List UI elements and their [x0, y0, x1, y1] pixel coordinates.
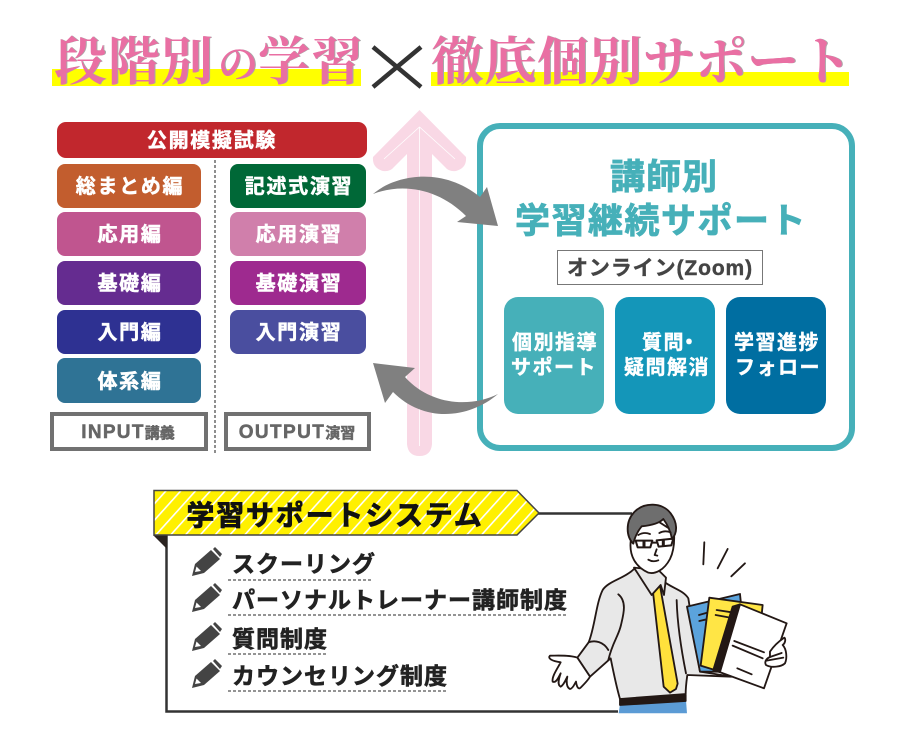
title text right: 別	[590, 35, 642, 92]
dashed divider	[214, 160, 216, 453]
icon: pencil	[192, 659, 222, 688]
input: applied	[57, 212, 201, 256]
blue folder	[687, 594, 742, 672]
input: introduction: 入門編	[97, 321, 163, 344]
card: progress follow-up: 学習進捗	[734, 331, 820, 354]
mock exam bar	[57, 122, 367, 158]
list item: questions	[192, 622, 328, 654]
online badge: オンライン(Zoom)	[567, 257, 753, 280]
icon: pencil	[192, 547, 222, 576]
illustration: man with documents	[549, 505, 787, 713]
panel heading: 講師別	[610, 158, 718, 197]
large pink upward arrow	[373, 110, 466, 456]
input: applied: 応用編	[97, 223, 163, 246]
title text left	[54, 35, 363, 92]
title text left: 習	[311, 35, 363, 92]
system banner: 学習サポートシステム	[186, 500, 484, 531]
input: system	[57, 358, 201, 403]
card: individual guidance: サポート	[511, 356, 597, 379]
title text left: 別	[161, 35, 213, 92]
output label	[226, 414, 369, 449]
title text right: ー	[747, 35, 799, 92]
card: questions: 質問・	[642, 331, 700, 354]
panel heading: 学習継続サポート	[515, 202, 807, 241]
glasses and facial features	[636, 531, 673, 561]
output: written	[230, 164, 366, 208]
output: written: 記述式演習	[245, 175, 353, 198]
list item: schooling: スクーリング	[232, 551, 376, 577]
output label: OUTPUT演習	[239, 422, 355, 443]
input label	[52, 414, 206, 449]
left hand	[549, 656, 590, 689]
online badge	[558, 250, 762, 284]
title text right: ポ	[695, 35, 747, 92]
mock exam bar: 公開模擬試験	[147, 129, 277, 152]
input: basics: 基礎編	[97, 272, 163, 295]
title text right: ト	[800, 35, 852, 92]
card: progress follow-up	[726, 297, 826, 414]
collar	[634, 568, 666, 595]
face	[630, 518, 674, 573]
trousers	[619, 700, 687, 713]
hair	[628, 505, 676, 544]
emphasis lines	[703, 542, 745, 576]
arrow: output to support	[373, 177, 498, 226]
input: introduction	[57, 310, 201, 354]
shirt	[577, 569, 732, 699]
panel heading	[515, 158, 807, 241]
panel: curriculum	[52, 122, 369, 453]
list item: counselling	[192, 659, 448, 691]
card: questions	[615, 297, 715, 414]
input: summary	[57, 164, 201, 208]
title highlight bars	[52, 69, 849, 86]
title text left: の	[218, 42, 258, 87]
white document	[713, 604, 787, 688]
card: individual guidance: 個別指導	[512, 330, 598, 354]
yellow folder	[701, 598, 763, 672]
title text right	[431, 35, 852, 92]
list item: counselling: カウンセリング制度	[232, 663, 448, 689]
output: applied: 応用演習	[256, 223, 342, 246]
input label: INPUT講義	[81, 422, 175, 443]
output: introduction	[230, 310, 366, 354]
output: basics	[230, 261, 366, 305]
title text right: 個	[537, 35, 589, 92]
shirt fold lines	[589, 594, 686, 673]
tie	[653, 586, 678, 693]
title text right: サ	[643, 35, 695, 92]
title text left: 段	[54, 35, 106, 92]
system banner	[154, 490, 539, 535]
input: system: 体系編	[97, 370, 163, 393]
title	[52, 35, 852, 92]
output: applied	[230, 212, 366, 256]
panel frame	[480, 126, 852, 448]
panel: teacher support	[480, 126, 852, 448]
right hand	[765, 638, 786, 667]
arrow: support to output	[373, 363, 498, 414]
input: basics	[57, 261, 201, 305]
title text right: 徹	[431, 35, 483, 92]
list item: schooling	[192, 547, 376, 580]
output: introduction: 入門演習	[256, 321, 342, 344]
output: basics: 基礎演習	[256, 272, 342, 295]
list item: questions: 質問制度	[232, 626, 328, 652]
panel: learning support system	[153, 490, 632, 712]
card: questions: 疑問解消	[624, 356, 710, 379]
system box outline	[153, 514, 632, 712]
icon: pencil	[192, 622, 222, 651]
title text left: 学	[258, 35, 310, 92]
card: progress follow-up: フォロー	[735, 357, 821, 379]
title text left: 階	[108, 35, 160, 92]
card: individual guidance	[504, 297, 604, 414]
icon: pencil	[192, 583, 222, 612]
input: summary: 総まとめ編	[76, 175, 184, 198]
cross mark	[373, 47, 421, 87]
list item: personal trainer: パーソナルトレーナー講師制度	[232, 587, 568, 613]
belt	[620, 695, 686, 705]
title text right: 底	[484, 35, 536, 92]
